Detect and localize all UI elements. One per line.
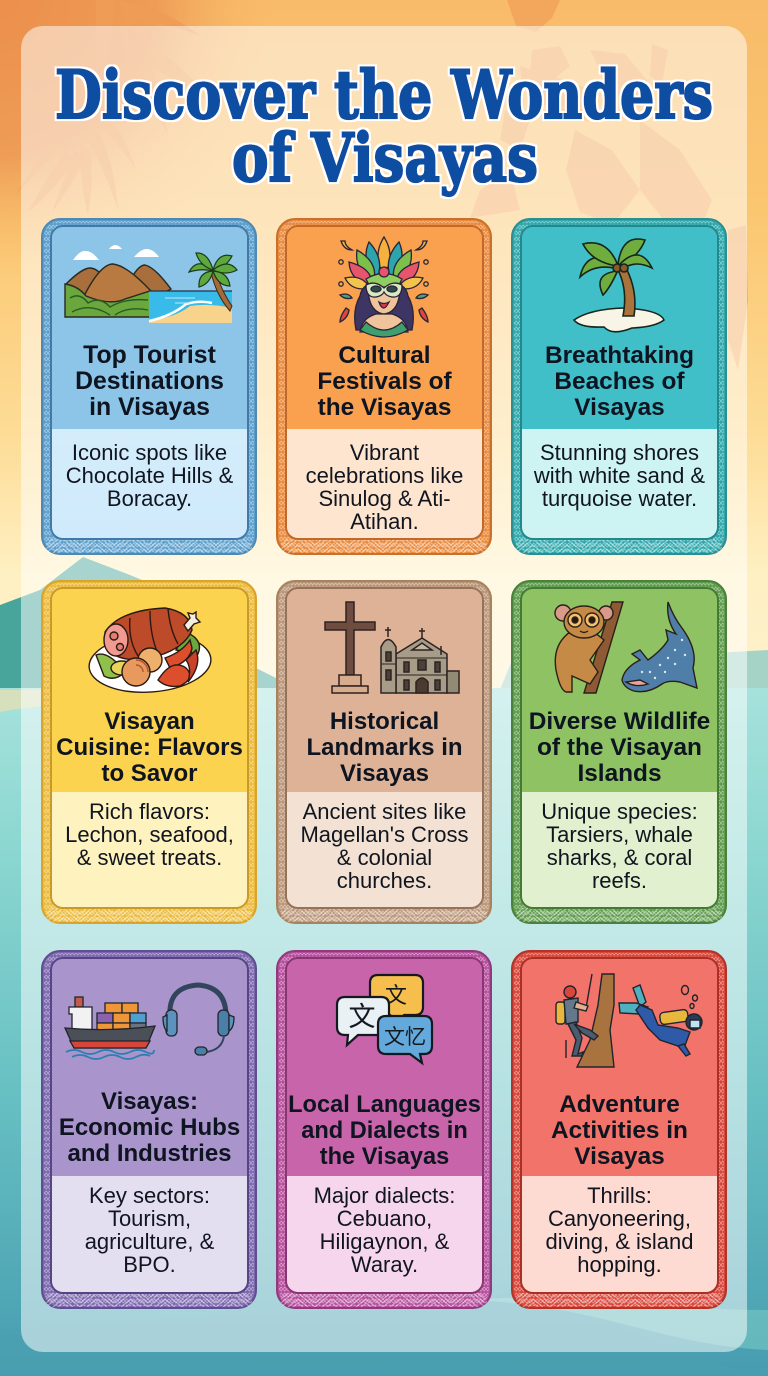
icon: climber and diver	[555, 973, 703, 1068]
description	[287, 1176, 482, 1292]
heading	[59, 1088, 240, 1167]
heading	[306, 708, 463, 787]
description: Canyoneering,	[548, 1206, 691, 1231]
heading	[75, 342, 224, 421]
heading: Breathtaking	[545, 342, 694, 369]
heading: Cultural	[338, 342, 431, 369]
description: turquoise water.	[542, 486, 697, 511]
card: economy	[41, 950, 257, 1309]
description: Lechon, seafood,	[65, 822, 234, 847]
description: with white sand &	[534, 463, 705, 488]
heading: Economic Hubs	[59, 1114, 240, 1141]
description: Unique species:	[541, 799, 698, 824]
description	[52, 792, 247, 907]
title: of Visayas	[232, 119, 538, 197]
description	[287, 792, 482, 907]
description: hopping.	[577, 1252, 662, 1277]
heading: Landmarks in	[306, 734, 463, 761]
description: Iconic spots like	[72, 440, 227, 465]
icon: tarsier and whale shark	[554, 601, 698, 694]
heading: Diverse Wildlife	[529, 708, 710, 735]
heading: of the Visayan	[537, 734, 702, 761]
card: languages	[276, 950, 492, 1309]
icon: speech bubbles: 文	[385, 978, 407, 1010]
description: Cebuano,	[337, 1206, 432, 1231]
description	[522, 1176, 717, 1292]
icon: cargo ship and headset	[64, 982, 235, 1060]
heading	[529, 708, 710, 787]
description: & sweet treats.	[77, 845, 222, 870]
heading	[317, 342, 452, 421]
description	[522, 792, 717, 907]
description: Magellan's Cross	[300, 822, 469, 847]
card: beaches	[511, 218, 727, 555]
description: sharks, & coral	[547, 845, 692, 870]
description: reefs.	[592, 868, 647, 893]
icon: speech bubbles	[336, 974, 434, 1066]
description: Tarsiers, whale	[546, 822, 693, 847]
description: Boracay.	[107, 486, 192, 511]
heading: Activities in	[551, 1117, 688, 1144]
heading: Adventure	[559, 1091, 680, 1118]
icon: speech bubbles: 文	[348, 995, 376, 1034]
description: Major dialects:	[314, 1183, 455, 1208]
icon: lechon plate	[88, 607, 212, 693]
description	[52, 429, 247, 538]
heading: Top Tourist	[83, 342, 216, 369]
description: BPO.	[123, 1252, 176, 1277]
icon: palm on island	[572, 238, 665, 333]
heading: Visayas	[574, 1143, 665, 1170]
description: Tourism,	[108, 1206, 191, 1231]
description: diving, & island	[546, 1229, 693, 1254]
card: cuisine	[41, 580, 257, 924]
description	[52, 1176, 247, 1292]
description: Vibrant	[350, 440, 419, 465]
heading: Local Languages	[288, 1092, 481, 1118]
heading: Visayas	[340, 760, 429, 787]
heading: Visayas	[574, 394, 665, 421]
heading: Visayan	[104, 708, 195, 735]
heading: the Visayas	[318, 394, 451, 421]
heading: the Visayas	[320, 1144, 449, 1170]
description: Atihan.	[350, 509, 419, 534]
description: Rich flavors:	[89, 799, 210, 824]
description: churches.	[337, 868, 432, 893]
icon: cross and church	[324, 601, 460, 694]
heading	[545, 342, 694, 421]
description	[522, 429, 717, 538]
description: Hiligaynon, &	[320, 1229, 449, 1254]
card: adventure	[511, 950, 727, 1309]
card: cultural festivals	[276, 218, 492, 555]
card: tourist destinations	[41, 218, 257, 555]
title	[54, 56, 714, 200]
description: Sinulog & Ati-	[318, 486, 451, 511]
heading	[288, 1092, 481, 1170]
heading: and Dialects in	[301, 1118, 468, 1144]
description: Chocolate Hills &	[66, 463, 233, 488]
description: & colonial	[337, 845, 432, 870]
description: Key sectors:	[89, 1183, 210, 1208]
heading	[56, 708, 243, 787]
heading: Festivals of	[317, 368, 452, 395]
heading: Destinations	[75, 368, 224, 395]
heading: to Savor	[101, 760, 198, 787]
heading: Visayas:	[101, 1088, 198, 1115]
description: Ancient sites like	[303, 799, 466, 824]
heading: Historical	[330, 708, 439, 735]
icon: speech bubbles: 文忆	[384, 1021, 426, 1051]
heading: Cuisine: Flavors	[56, 734, 243, 761]
description: agriculture, &	[85, 1229, 214, 1254]
description: celebrations like	[306, 463, 463, 488]
description: Stunning shores	[540, 440, 699, 465]
heading: Islands	[577, 760, 662, 787]
card: wildlife	[511, 580, 727, 924]
icon: hills and beach	[64, 245, 238, 323]
heading: and Industries	[67, 1140, 232, 1167]
icon: festival dancer	[338, 236, 430, 338]
heading: in Visayas	[89, 394, 210, 421]
heading	[551, 1091, 688, 1170]
description: Thrills:	[587, 1183, 652, 1208]
heading: Beaches of	[554, 368, 685, 395]
description	[287, 429, 482, 538]
description: Waray.	[351, 1252, 418, 1277]
card: landmarks	[276, 580, 492, 924]
